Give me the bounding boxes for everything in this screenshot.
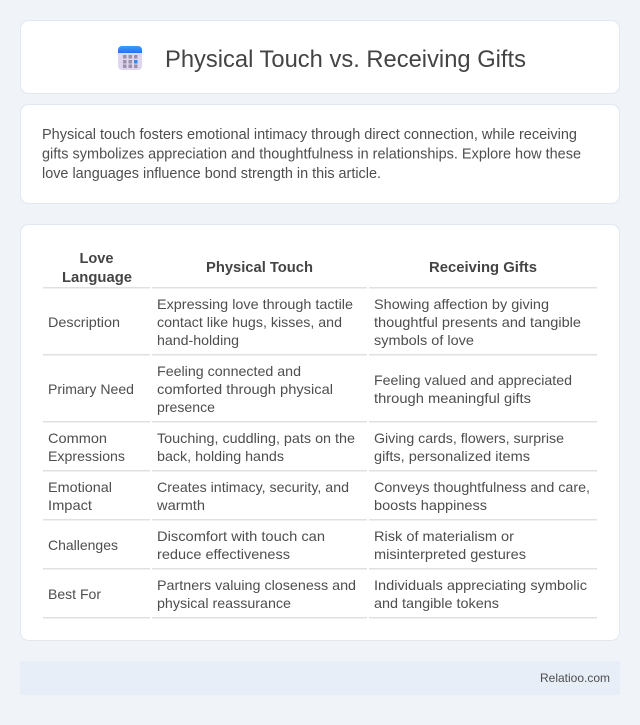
table header bbox=[62, 251, 537, 286]
row: Primary Need: Feeling connected and bbox=[157, 363, 301, 379]
panel: comparison table bbox=[20, 224, 620, 640]
text block: introduction: love languages influence bond strength in this article. bbox=[42, 166, 381, 182]
title: Physical Touch vs. Receiving Gifts bbox=[165, 46, 526, 73]
footer: Relatioo.com bbox=[540, 671, 610, 685]
row: Emotional Impact: Emotional bbox=[48, 479, 112, 495]
table header: Love bbox=[80, 251, 114, 267]
row: Challenges: misinterpreted gestures bbox=[374, 546, 526, 562]
row: Common Expressions: Common bbox=[48, 430, 107, 446]
row: Common Expressions: Touching, cuddling, pats on the bbox=[157, 430, 355, 446]
row: Best For: Partners valuing closeness and bbox=[157, 577, 356, 593]
row: Challenges bbox=[48, 528, 526, 562]
row: Best For: physical reassurance bbox=[157, 595, 291, 611]
row: Common Expressions: back, holding hands bbox=[157, 448, 284, 464]
row: Challenges: reduce effectiveness bbox=[157, 546, 290, 562]
row: Description: Expressing love through tactile bbox=[157, 296, 353, 312]
row: Description: Showing affection by giving bbox=[374, 296, 549, 312]
row: Challenges: Challenges bbox=[48, 537, 118, 553]
row: Description: hand-holding bbox=[157, 332, 239, 348]
row: Emotional Impact: warmth bbox=[156, 497, 205, 513]
row: Best For bbox=[48, 577, 587, 611]
row: Primary Need: presence bbox=[157, 399, 215, 415]
row: Description: contact like hugs, kisses, and bbox=[157, 314, 342, 330]
panel: title card bbox=[20, 20, 620, 94]
row: Primary Need bbox=[48, 363, 572, 415]
row: Common Expressions: gifts, personalized items bbox=[374, 448, 530, 464]
text block: introduction bbox=[42, 127, 581, 182]
row: Emotional Impact: Impact bbox=[48, 497, 92, 513]
row: Description: symbols of love bbox=[374, 332, 474, 348]
row: Primary Need: through meaningful gifts bbox=[374, 390, 531, 406]
row: Common Expressions: Expressions bbox=[48, 448, 125, 464]
table header: Language bbox=[62, 270, 132, 286]
table header: Physical Touch bbox=[206, 260, 313, 276]
table header: Receiving Gifts bbox=[429, 260, 537, 276]
row: Challenges: Risk of materialism or bbox=[374, 528, 514, 544]
row: Common Expressions bbox=[48, 430, 564, 464]
row: Description: thoughtful presents and tangible bbox=[374, 314, 581, 330]
row: Challenges: Discomfort with touch can bbox=[157, 528, 325, 544]
row: Common Expressions: Giving cards, flowers, surprise bbox=[374, 430, 564, 446]
icon: calendar bbox=[118, 46, 142, 70]
footer bbox=[20, 661, 620, 695]
row: Best For: Individuals appreciating symbolic bbox=[374, 577, 587, 593]
row: Best For: and tangible tokens bbox=[374, 595, 499, 611]
row: Emotional Impact: Conveys thoughtfulness and care, bbox=[374, 479, 590, 495]
text block: introduction: gifts symbolizes appreciation and thoughtfulness in relationships. Explore how these bbox=[42, 146, 581, 162]
row: Emotional Impact: boosts happiness bbox=[374, 497, 487, 513]
row: Primary Need: comforted through physical bbox=[157, 381, 333, 397]
row: Primary Need: Primary Need bbox=[48, 381, 134, 397]
row: Primary Need: Feeling valued and appreciated bbox=[374, 372, 572, 388]
panel: introduction bbox=[20, 104, 620, 204]
row: Best For: Best For bbox=[48, 586, 101, 602]
row: Emotional Impact bbox=[48, 479, 590, 513]
text block: introduction: Physical touch fosters emotional intimacy through direct connection, while receiving bbox=[42, 127, 577, 143]
row: Emotional Impact: Creates intimacy, security, and bbox=[157, 479, 349, 495]
row: Description bbox=[48, 296, 581, 348]
row: Description: Description bbox=[48, 314, 120, 330]
